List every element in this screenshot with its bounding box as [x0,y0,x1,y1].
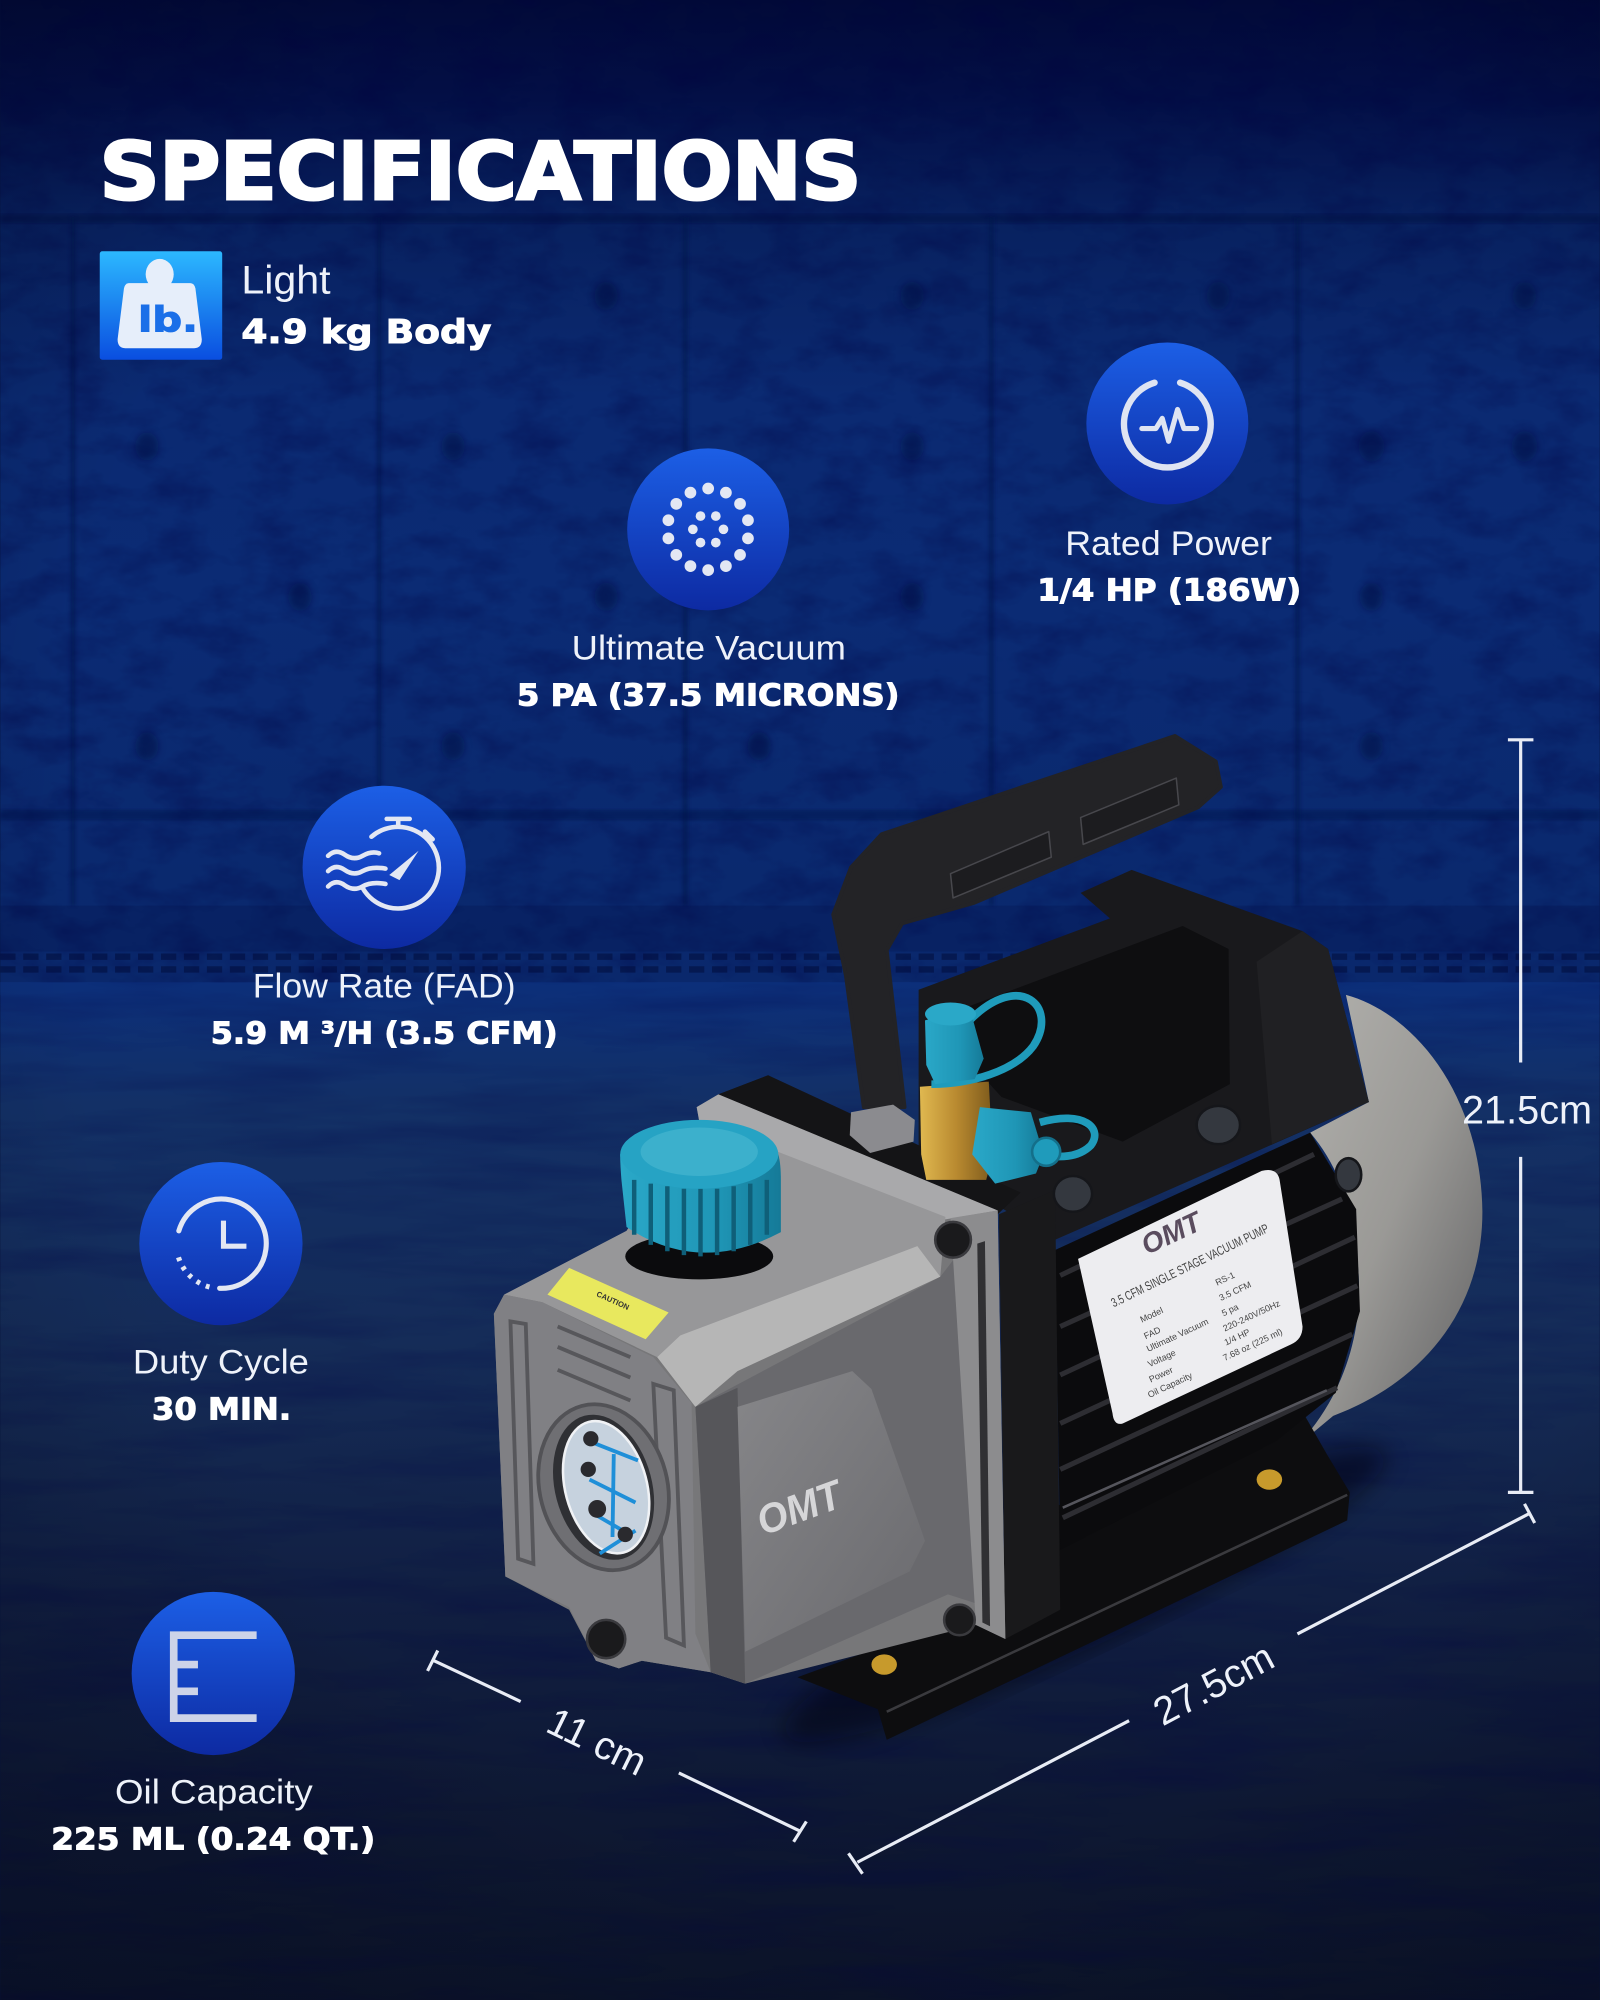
spec: oil capacity [51,1592,375,1857]
housing logo: OMT [750,1470,850,1544]
dimension: height 21.5cm: 21.5cm [1462,1089,1592,1133]
motor spec label: 3.5 CFM [1218,1279,1253,1303]
icon: vacuum dots [627,448,789,610]
oil cap [620,1120,781,1279]
motor body with fins [1055,1133,1360,1550]
icon: lb weight: lb. [138,301,198,341]
black motor frame [999,1190,1060,1639]
black shroud [718,870,1369,1240]
dimension: length 27.5cm [848,1504,1535,1874]
motor spec label: OMT [1136,1205,1209,1261]
dimension: height 21.5cm [1462,740,1592,1492]
text: light: Light [241,258,331,302]
base plate [797,1409,1350,1740]
screws [1054,1106,1361,1212]
motor spec label: RS-1 [1214,1270,1236,1288]
text: 5.9 m3/h: 5.9 M ³/H (3.5 CFM) [211,1016,558,1051]
brass valve and blue caps [920,996,1095,1184]
text: duty cycle: Duty Cycle [133,1344,309,1382]
caution sticker: CAUTION [595,1290,631,1312]
dimension: width 11 cm [428,1651,806,1842]
motor spec label [1078,1170,1303,1424]
motor spec label: 5 pa [1220,1302,1240,1318]
icon: level scale [132,1592,295,1755]
text: 5 pa: 5 PA (37.5 MICRONS) [517,678,899,713]
motor spec label: 220-240V/50Hz [1221,1298,1282,1333]
caution sticker [547,1268,669,1339]
icon: lb weight [100,251,222,360]
text: 225 ml: 225 ML (0.24 QT.) [51,1822,375,1857]
silver nut [850,1105,915,1153]
motor spec label: Power [1147,1365,1175,1384]
spec: rated power [1037,342,1301,609]
spec: light weight [100,251,492,360]
motor spec label: Oil Capacity [1146,1370,1194,1400]
oil sight glass [520,1389,687,1585]
text: 1/4 hp: 1/4 HP (186W) [1037,574,1301,609]
spec: ultimate vacuum [517,448,899,713]
spec: duty cycle [133,1162,309,1428]
title: SPECIFICATIONS [100,126,861,218]
motor end dome [1295,995,1482,1448]
icon: clock [139,1162,303,1325]
text: 30 min: 30 MIN. [152,1393,291,1428]
text: 4.9 kg body: 4.9 kg Body [241,312,492,351]
motor spec label: FAD [1142,1325,1162,1341]
text: flow rate: Flow Rate (FAD) [253,967,516,1005]
icon: stopwatch with waves [303,786,466,949]
dimension: length 27.5cm: 27.5cm [1146,1635,1281,1734]
motor spec label: 3.5 CFM SINGLE STAGE VACUUM PUMP [1109,1221,1271,1310]
motor spec label: Voltage [1146,1348,1177,1369]
motor spec label: Ultimate Vacuum [1145,1316,1210,1354]
pump product illustration [494,736,1482,1781]
text: oil capacity: Oil Capacity [115,1774,314,1812]
gray front housing [494,1094,1005,1684]
text: ultimate vacuum: Ultimate Vacuum [572,629,846,667]
text: rated power: Rated Power [1065,525,1272,563]
spec: flow rate [211,786,558,1051]
dimension: width 11 cm: 11 cm [540,1699,653,1785]
motor spec label: Model [1138,1305,1165,1325]
motor spec label: 7.68 oz (225 ml) [1221,1327,1284,1363]
icon: pulse ring [1086,342,1248,504]
motor spec label: 1/4 HP [1223,1327,1252,1347]
handle [833,736,1221,1107]
housing bolts [587,1222,975,1658]
